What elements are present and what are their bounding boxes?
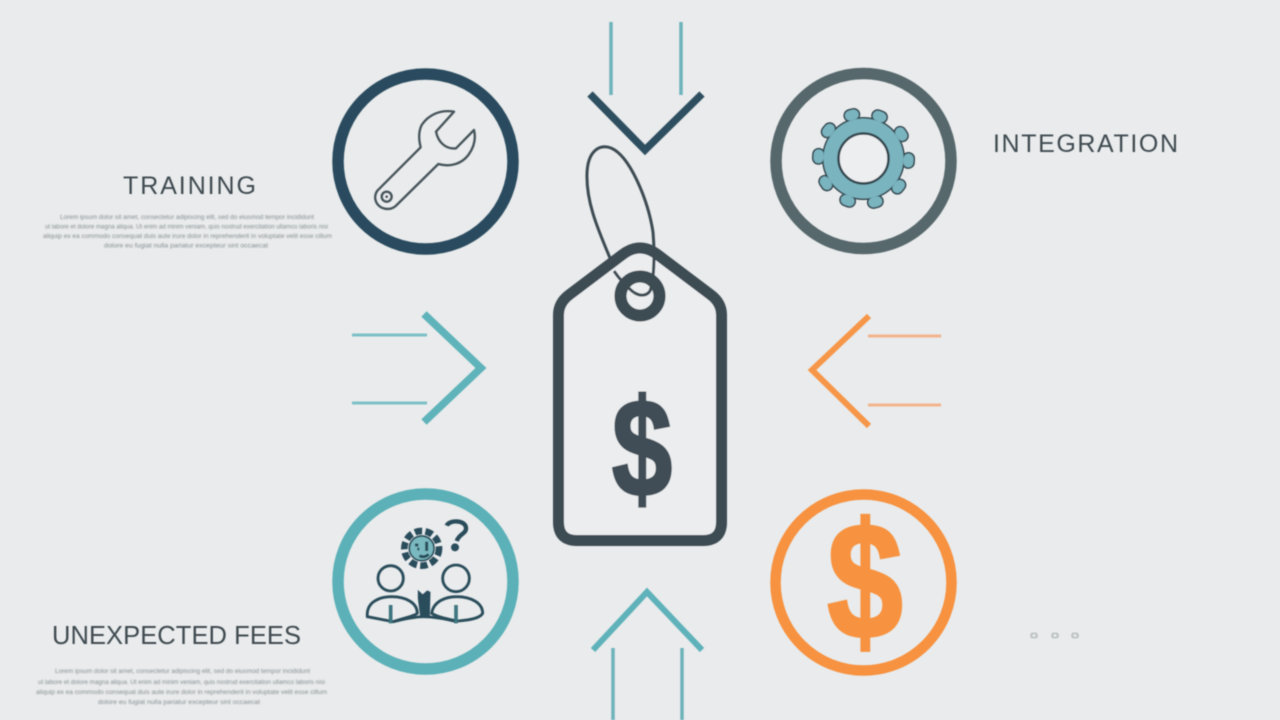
text block: training description <box>43 214 332 250</box>
central price tag <box>558 147 722 540</box>
panel: integration icon <box>776 74 951 248</box>
arrow: top, pointing down <box>590 22 702 150</box>
text block: training description: Lorem ipsum dolor sit amet, consectetur adipiscing elit, sed do eiusmod tempor incididunt <box>60 214 314 221</box>
ring: training <box>338 74 513 249</box>
ring: integration <box>776 74 951 248</box>
tag string <box>587 147 654 295</box>
arrow: right, pointing left <box>812 316 941 426</box>
icon: gear <box>818 114 908 204</box>
arrow: bottom, pointing up <box>593 592 702 720</box>
text block: unexpected fees description: aliquip ex ea commodo consequat duis aute irure dolor in reprehenderit in voluptate velit esse cillum <box>36 689 327 696</box>
icon: wrench <box>375 111 475 209</box>
panel: cost icon <box>776 489 952 674</box>
ring: cost <box>776 494 952 670</box>
text block: unexpected fees description <box>36 668 327 706</box>
heading: training: TRAINING <box>123 172 256 200</box>
pagination dots <box>1031 633 1078 638</box>
tag eyelet <box>620 276 660 316</box>
arrow: left, pointing right <box>352 314 481 422</box>
icon: two people with a gear and question mark <box>367 521 483 623</box>
tag body <box>558 248 722 540</box>
icon: orange dollar sign: $ <box>827 489 903 674</box>
text block: training description: aliquip ex ea commodo consequat duis aute irure dolor in reprehenderit in voluptate velit esse cillum <box>43 233 332 240</box>
ring: unexpected fees <box>338 494 513 669</box>
heading: unexpected fees: UNEXPECTED FEES <box>52 622 301 650</box>
tag dollar sign: $ <box>612 371 672 526</box>
text block: training description: ut labore et dolore magna aliqua. Ut enim ad minim veniam, quis nostrud exercitation ullamco laboris nisi <box>45 224 328 230</box>
text block: unexpected fees description: Lorem ipsum dolor sit amet, consectetur adipiscing elit, sed do eiusmod tempor incididunt <box>55 668 310 675</box>
panel: unexpected fees icon <box>338 494 513 669</box>
text block: training description: dolore eu fugiat nulla pariatur excepteur sint occaecat <box>104 242 268 250</box>
panel: training icon <box>338 74 513 249</box>
heading: integration: INTEGRATION <box>993 130 1178 158</box>
text block: unexpected fees description: ut labore et dolore magna aliqua. Ut enim ad minim veniam, quis nostrud exercitation ullamco laboris nisi <box>38 679 325 686</box>
text block: unexpected fees description: dolore eu fugiat nulla pariatur excepteur sint occaecat <box>98 699 260 706</box>
